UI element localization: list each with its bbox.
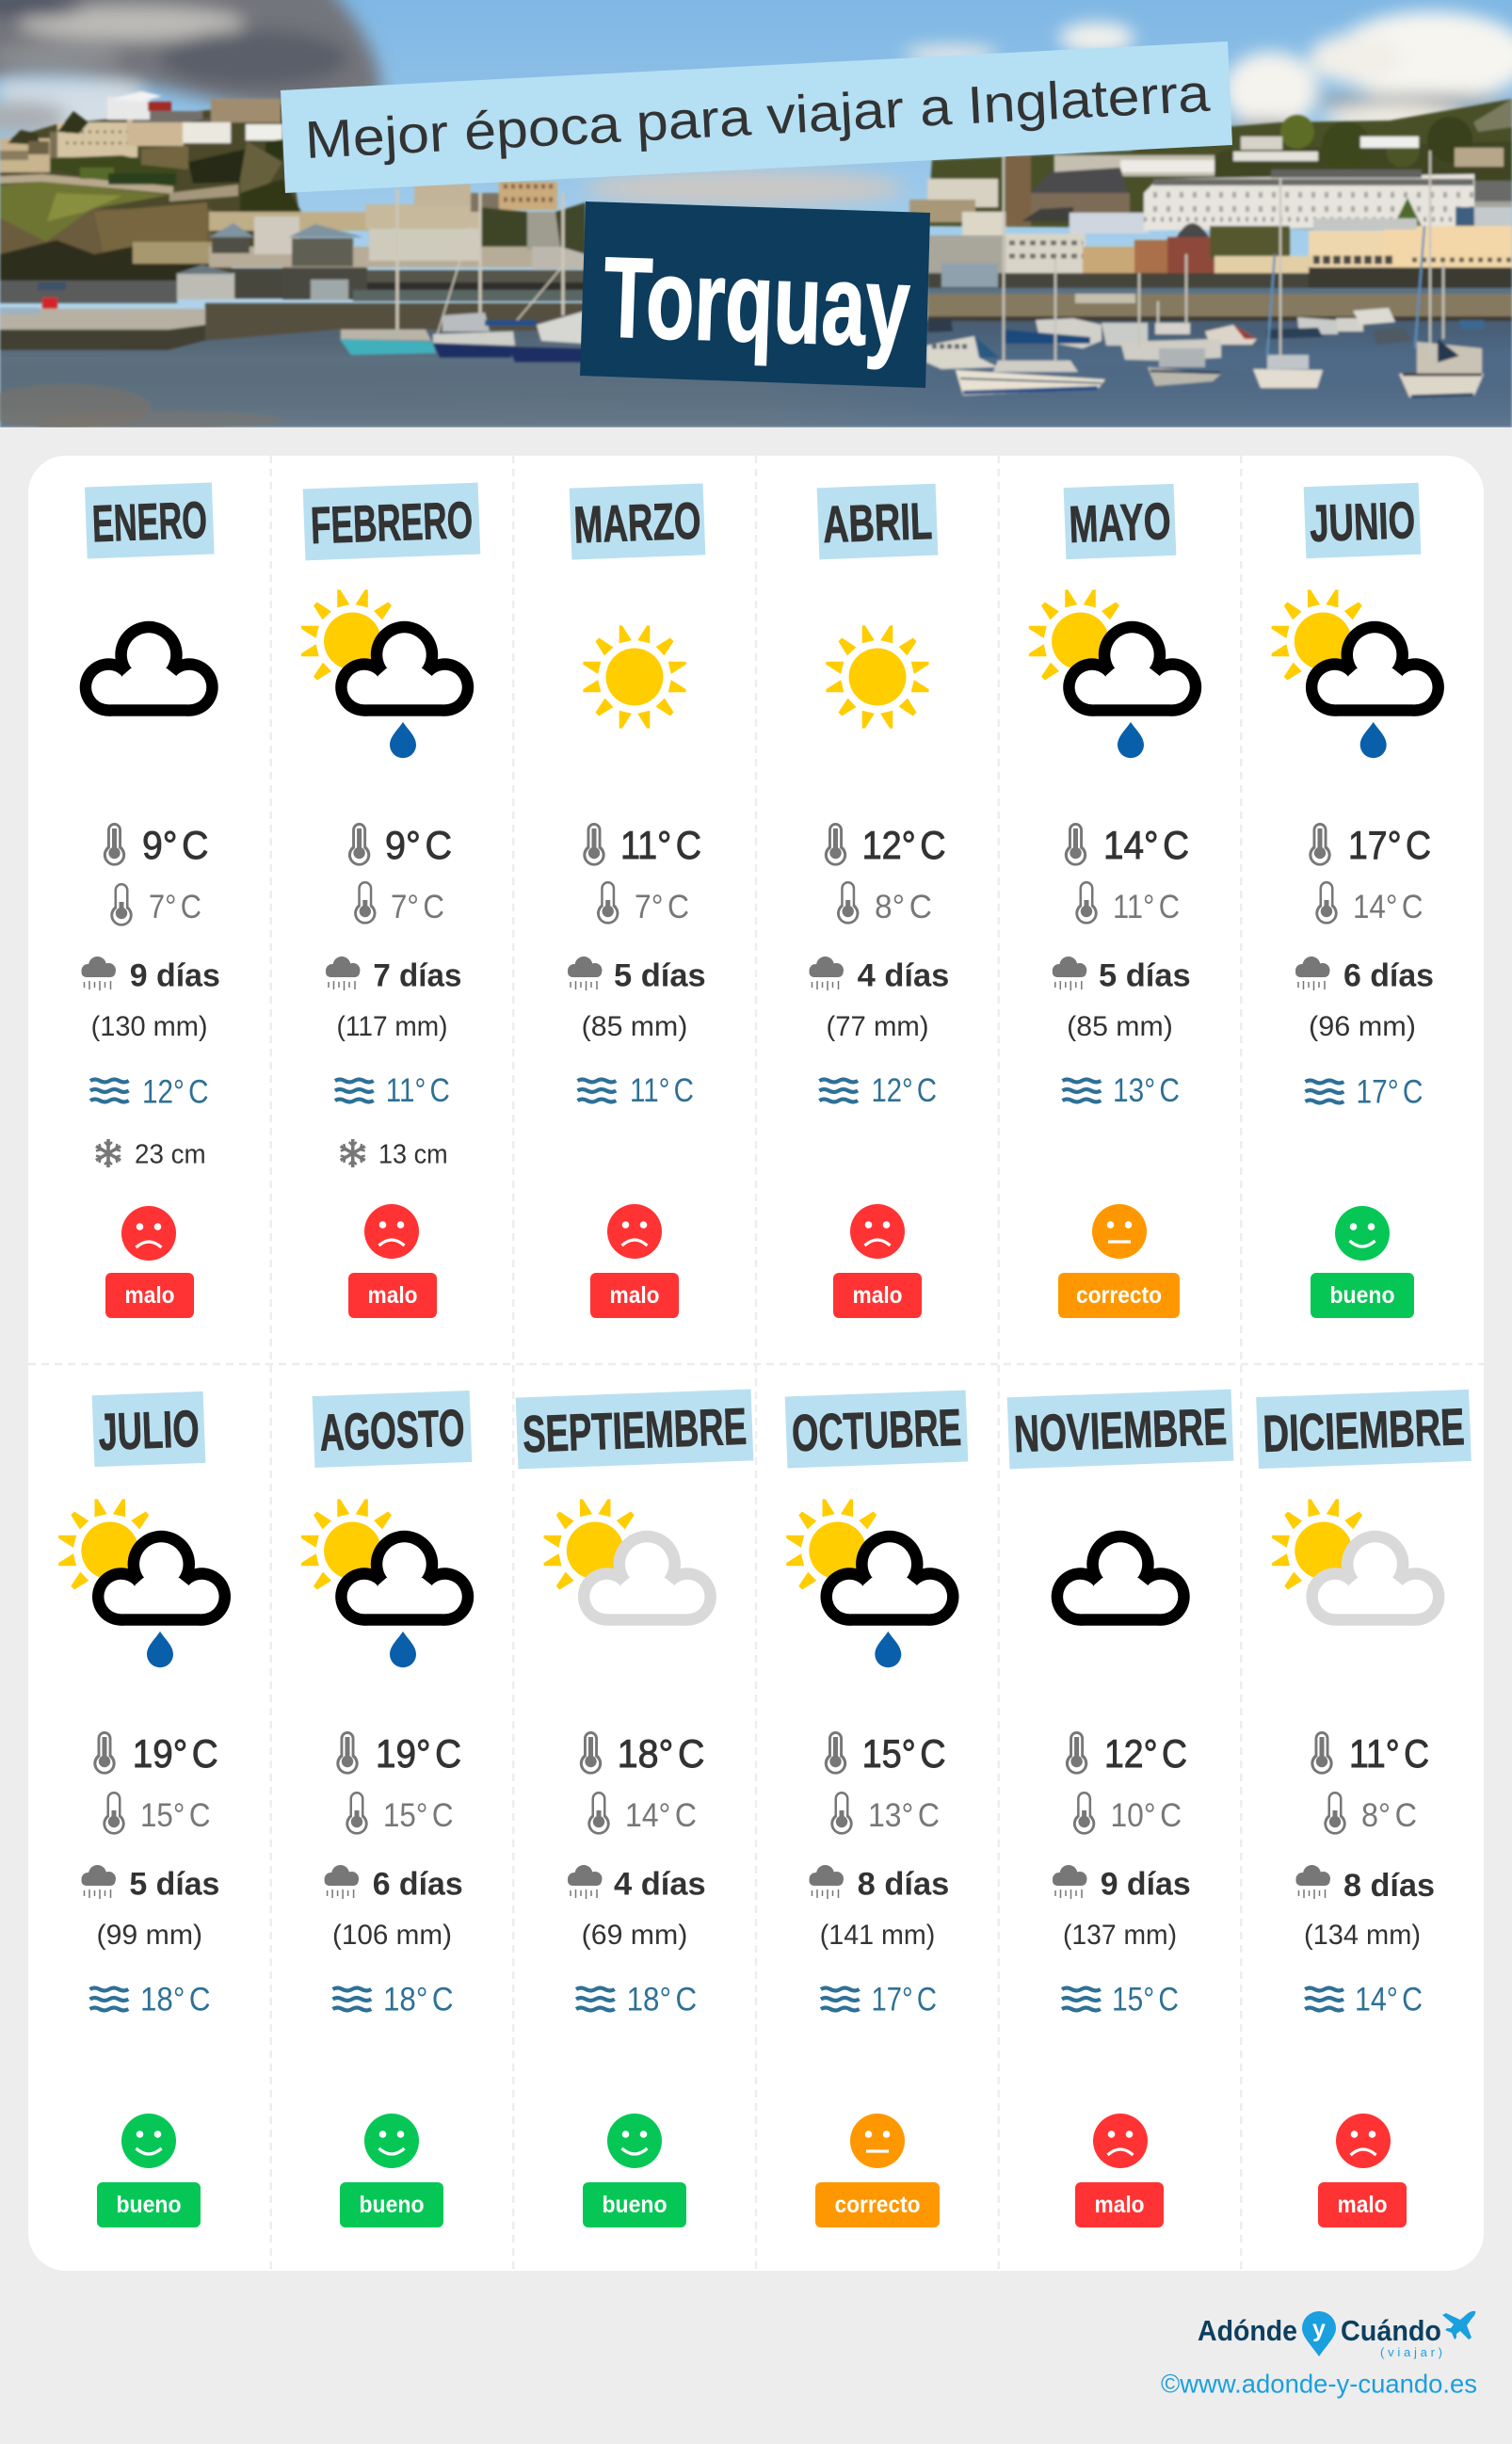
- column: marzo: [568, 483, 706, 1318]
- snowfall: 23 cm: [135, 1140, 206, 1170]
- month heading: agosto: AGOSTO: [318, 1398, 466, 1462]
- rain icon: [81, 957, 116, 990]
- sea temperature: 18°C: [140, 1981, 211, 2018]
- rainfall: (137 mm): [1063, 1920, 1177, 1951]
- rating badge: [583, 2182, 686, 2227]
- month heading: febrero: [303, 483, 480, 560]
- rainfall: (96 mm): [1309, 1011, 1416, 1042]
- month heading: abril: ABRIL: [822, 491, 933, 554]
- thermometer icon: high: [1311, 1731, 1333, 1775]
- pavilion buildings: [209, 212, 369, 231]
- high temperature: 14°C: [1103, 823, 1189, 867]
- title banner: [281, 41, 1232, 193]
- waves icon: [90, 1079, 129, 1101]
- sea temperature: 12°C: [872, 1072, 937, 1109]
- high temperature: 11°C: [620, 823, 701, 867]
- face: good: [1335, 1206, 1390, 1261]
- right town: [927, 99, 1512, 231]
- rain icon: [1295, 1865, 1330, 1899]
- month heading: octubre: [785, 1391, 968, 1468]
- rating badge: malo: [610, 1282, 659, 1309]
- rating badge: bueno: [1329, 1282, 1395, 1309]
- waves icon: [1062, 1079, 1101, 1101]
- low temperature: 8°C: [1361, 1797, 1417, 1834]
- rain icon: [1053, 957, 1086, 990]
- thermometer icon: low: [837, 881, 859, 925]
- weather icon: sun, cloud and drop: [1029, 589, 1201, 758]
- rating badge: malo: [1094, 2192, 1145, 2218]
- weather icon: sun, cloud and drop: [1272, 589, 1444, 758]
- waves icon: [1305, 1988, 1343, 2011]
- high temperature: 15°C: [862, 1731, 946, 1776]
- rainfall: (69 mm): [582, 1920, 687, 1951]
- low temperature: 7°C: [635, 889, 689, 925]
- rainfall: (99 mm): [96, 1920, 202, 1951]
- low temperature: 14°C: [625, 1797, 697, 1834]
- waves icon: [90, 1988, 128, 2011]
- weather icon: sun and grey cloud: [544, 1499, 716, 1626]
- sea temperature: 14°C: [1355, 1981, 1423, 2018]
- thermometer icon: low: [1324, 1792, 1346, 1835]
- month heading: marzo: MARZO: [572, 491, 702, 554]
- rainfall: (85 mm): [582, 1011, 687, 1042]
- face: good: [121, 2114, 176, 2168]
- rating badge: [1311, 1273, 1414, 1318]
- thermometer icon: low: [354, 881, 377, 925]
- thermometer icon: high: [580, 1731, 602, 1775]
- waves icon: [819, 1079, 858, 1101]
- sea temperature: 15°C: [1112, 1981, 1179, 2018]
- month heading: julio: [92, 1391, 205, 1467]
- rating badge: bueno: [603, 2192, 667, 2218]
- rating badge: [340, 2182, 443, 2227]
- thermometer icon: high: [825, 1731, 846, 1775]
- rain icon: [1053, 1865, 1086, 1899]
- rainfall: (117 mm): [337, 1011, 448, 1042]
- rainfall: (77 mm): [827, 1011, 928, 1042]
- month heading: mayo: [1064, 484, 1176, 559]
- icon: map pin: [1302, 2311, 1336, 2356]
- hero photo: Torquay harbour: [0, 0, 1512, 429]
- promenade and quay: [365, 270, 586, 283]
- month heading: noviembre: NOVIEMBRE: [1013, 1397, 1228, 1463]
- rating badge: [590, 1273, 679, 1318]
- rain days: 4 días: [614, 1866, 706, 1902]
- thermometer icon: high: [825, 823, 846, 866]
- thermometer icon: low: [1073, 1792, 1095, 1835]
- column: febrero: [301, 483, 480, 1318]
- rain icon: [568, 957, 603, 990]
- rating badge: [1318, 2182, 1407, 2227]
- column: octubre: [785, 1391, 968, 2227]
- rain days: 8 días: [1343, 1868, 1435, 1904]
- city banner: Torquay: Torquay: [602, 233, 911, 371]
- rain days: 5 días: [129, 1866, 219, 1902]
- column: enero: [80, 483, 220, 1318]
- thermometer icon: low: [346, 1792, 368, 1835]
- high temperature: 12°C: [1104, 1731, 1187, 1776]
- column: agosto: [301, 1391, 474, 2227]
- sea temperature: 17°C: [1356, 1073, 1424, 1111]
- snowflake icon: [96, 1139, 121, 1167]
- waves icon: [335, 1079, 374, 1101]
- low temperature: 15°C: [140, 1797, 211, 1834]
- left boats: [397, 188, 565, 339]
- rain days: 9 días: [1101, 1866, 1191, 1902]
- high temperature: 17°C: [1348, 823, 1431, 867]
- thermometer icon: high: [348, 823, 370, 866]
- water: [0, 321, 1512, 427]
- weather icon: sun and grey cloud: [1272, 1499, 1444, 1626]
- column: mayo: [1029, 484, 1201, 1318]
- weather icon: sun: [826, 625, 929, 729]
- column: abril: [810, 484, 949, 1318]
- rating badge: bueno: [117, 2192, 181, 2218]
- rating badge: malo: [1337, 2192, 1388, 2218]
- low temperature: 8°C: [875, 889, 932, 925]
- face: bad: [364, 1204, 419, 1259]
- icon: plane: [1442, 2311, 1475, 2339]
- weather icon: sun: [583, 625, 686, 729]
- logo: Adónde y Cuándo: [1198, 2311, 1475, 2359]
- thermometer icon: low: [103, 1792, 125, 1835]
- weather icon: sun, cloud and drop: [786, 1499, 958, 1667]
- high temperature: 11°C: [1349, 1731, 1429, 1776]
- panel: climate table: [28, 456, 1484, 2271]
- low temperature: 15°C: [383, 1797, 454, 1834]
- thermometer icon: high: [583, 823, 605, 866]
- source url: ©www.adonde-y-cuando.es: [1161, 2370, 1477, 2399]
- face: bad: [1093, 2114, 1148, 2168]
- sea temperature: 18°C: [383, 1981, 454, 2018]
- thermometer icon: high: [104, 823, 125, 866]
- waves icon: [578, 1079, 616, 1101]
- rain days: 5 días: [1099, 958, 1191, 994]
- rating badge: [348, 1273, 437, 1318]
- sea temperature: 12°C: [142, 1073, 209, 1111]
- logo: Adónde y Cuándo: (viajar): [1380, 2345, 1442, 2359]
- thermometer icon: low: [587, 1792, 610, 1835]
- column: septiembre: [516, 1389, 753, 2227]
- month heading: septiembre: SEPTIEMBRE: [522, 1397, 748, 1463]
- thermometer icon: low: [1075, 881, 1098, 925]
- rating badge: malo: [367, 1282, 418, 1309]
- rain days: 7 días: [373, 958, 461, 994]
- face: bad: [850, 1204, 905, 1259]
- face: good: [607, 2114, 662, 2168]
- rating badge: [105, 1273, 194, 1318]
- rain icon: [325, 1865, 359, 1899]
- rating badge: bueno: [360, 2192, 424, 2218]
- rating badge: [815, 2182, 940, 2227]
- thermometer icon: high: [1066, 1731, 1087, 1775]
- column: diciembre: [1256, 1390, 1472, 2227]
- rain icon: [568, 1865, 603, 1899]
- rainfall: (106 mm): [332, 1920, 452, 1951]
- month heading: abril: [817, 484, 938, 559]
- high temperature: 9°C: [385, 823, 452, 867]
- rating badge: [1075, 2182, 1164, 2227]
- rating badge: [833, 1273, 922, 1318]
- month heading: julio: JULIO: [97, 1399, 201, 1461]
- month heading: octubre: OCTUBRE: [791, 1398, 962, 1462]
- rating badge: malo: [853, 1282, 902, 1309]
- waves icon: [821, 1988, 860, 2011]
- month heading: marzo: [570, 483, 705, 560]
- rating badge: correcto: [834, 2192, 921, 2218]
- face: bad: [607, 1204, 662, 1259]
- rainfall: (134 mm): [1304, 1920, 1421, 1951]
- sea temperature: 13°C: [1113, 1072, 1180, 1109]
- snowflake icon: [341, 1139, 365, 1167]
- waves icon: [1062, 1988, 1101, 2011]
- sea temperature: 17°C: [872, 1981, 937, 2018]
- rainfall: (85 mm): [1067, 1011, 1173, 1042]
- rain days: 8 días: [858, 1866, 949, 1902]
- low temperature: 13°C: [868, 1797, 940, 1834]
- face: neutral: [850, 2114, 905, 2168]
- title banner: Mejor época para viajar a Inglaterra: [303, 63, 1212, 169]
- high temperature: 9°C: [142, 823, 209, 867]
- rain icon: [810, 1865, 844, 1899]
- weather icon: sun, cloud and drop: [58, 1499, 231, 1667]
- logo: Adónde y Cuándo: Cuándo: [1341, 2314, 1441, 2347]
- rain icon: [81, 1865, 116, 1899]
- sea temperature: 11°C: [630, 1072, 694, 1109]
- logo: Adónde y Cuándo: Adónde: [1198, 2314, 1297, 2347]
- high temperature: 19°C: [133, 1731, 218, 1776]
- low temperature: 11°C: [1113, 889, 1180, 925]
- rating badge: [97, 2182, 201, 2227]
- sea temperature: 11°C: [386, 1072, 450, 1109]
- rainfall: (141 mm): [820, 1920, 935, 1951]
- month heading: mayo: MAYO: [1068, 491, 1172, 554]
- high temperature: 19°C: [376, 1731, 461, 1776]
- thermometer icon: high: [93, 1731, 116, 1775]
- waves icon: [576, 1988, 615, 2011]
- rainfall: (130 mm): [91, 1011, 208, 1042]
- month heading: noviembre: [1007, 1390, 1233, 1469]
- waves icon: [1305, 1081, 1343, 1103]
- face: good: [364, 2114, 419, 2168]
- weather icon: sun, cloud and drop: [301, 1499, 474, 1667]
- rain days: 5 días: [614, 958, 706, 994]
- thermometer icon: low: [830, 1792, 853, 1835]
- month heading: agosto: [313, 1391, 472, 1468]
- weather icon: sun, cloud and drop: [301, 589, 474, 758]
- high temperature: 12°C: [862, 823, 946, 867]
- rain days: 6 días: [1343, 958, 1434, 994]
- face: neutral: [1092, 1204, 1147, 1259]
- left hillside: [0, 103, 299, 270]
- rating badge: correcto: [1076, 1282, 1162, 1309]
- rain icon: [810, 957, 844, 990]
- month heading: septiembre: [516, 1389, 753, 1470]
- icon: map pin: y: [1312, 2316, 1326, 2342]
- thermometer icon: high: [1065, 823, 1086, 866]
- month heading: junio: [1304, 483, 1421, 558]
- month heading: junio: JUNIO: [1309, 490, 1416, 553]
- month heading: febrero: FEBRERO: [310, 490, 474, 555]
- high temperature: 18°C: [618, 1731, 704, 1776]
- rain days: 4 días: [858, 958, 949, 994]
- rain icon: [1295, 957, 1329, 990]
- rain days: 6 días: [373, 1866, 463, 1902]
- face: bad: [121, 1206, 176, 1261]
- thermometer icon: low: [1315, 881, 1338, 925]
- rain days: 9 días: [130, 958, 220, 994]
- sea temperature: 18°C: [627, 1981, 697, 2018]
- weather icon: cloud: [80, 621, 218, 716]
- thermometer icon: high: [1309, 823, 1331, 866]
- column: julio: [58, 1391, 231, 2227]
- rating badge: [1058, 1273, 1180, 1318]
- low temperature: 10°C: [1111, 1797, 1182, 1834]
- thermometer icon: low: [110, 883, 133, 926]
- rating badge: malo: [124, 1282, 175, 1309]
- waves icon: [333, 1988, 371, 2011]
- thermometer icon: high: [336, 1731, 359, 1775]
- low temperature: 7°C: [149, 889, 201, 925]
- snowfall: 13 cm: [378, 1140, 448, 1170]
- low temperature: 7°C: [391, 889, 444, 925]
- rain icon: [326, 957, 360, 990]
- low temperature: 14°C: [1353, 889, 1424, 925]
- month heading: enero: ENERO: [91, 490, 208, 553]
- thermometer icon: low: [597, 881, 619, 925]
- column: junio: [1272, 483, 1444, 1318]
- city banner: Torquay: [580, 201, 930, 388]
- weather icon: cloud: [1052, 1531, 1190, 1626]
- moored boats, right: [1102, 323, 1148, 346]
- face: bad: [1336, 2114, 1391, 2168]
- column: noviembre: [1007, 1390, 1233, 2227]
- month heading: enero: [85, 483, 215, 558]
